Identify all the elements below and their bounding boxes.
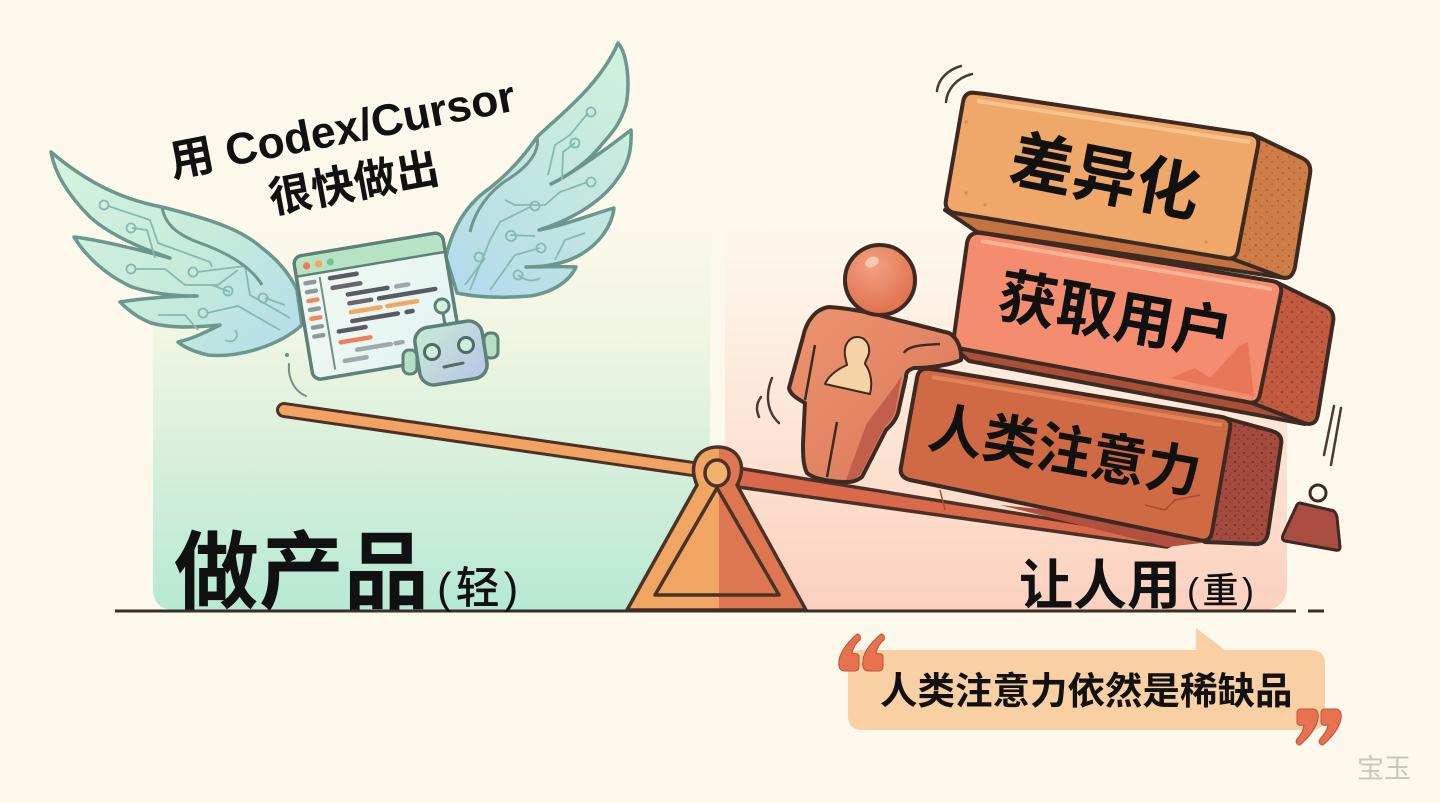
person head: [845, 245, 915, 315]
seesaw beam: heavy right arm: [738, 468, 1180, 547]
icon: left circuit wing: [51, 152, 302, 355]
brick label: 差异化: [1004, 123, 1206, 231]
heading main words: 做产品: [174, 526, 429, 621]
seesaw beam: light left arm: [284, 410, 700, 470]
brick label: 获取用户: [993, 263, 1237, 369]
brick surface marks: [940, 490, 1200, 510]
opening quote mark: [839, 634, 884, 671]
brick front face: [901, 369, 1230, 541]
person body: [789, 307, 961, 482]
brick surface marks: [964, 120, 1208, 244]
robot antenna: [435, 299, 449, 325]
icon: right circuit wing: [446, 43, 631, 297]
person badge: [825, 337, 871, 394]
brick label: 人类注意力: [924, 397, 1206, 505]
brick front face: [954, 233, 1281, 403]
seesaw fulcrum: [627, 447, 806, 610]
label line one: 用 Codex/Cursor: [165, 72, 519, 187]
fulcrum ring: [705, 460, 729, 486]
callout text: 人类注意力依然是稀缺品: [880, 670, 1292, 712]
brick bottom face: [945, 210, 1285, 278]
robot face: [424, 338, 474, 367]
icon: code window: [293, 232, 463, 380]
label: fast build with Codex/Cursor: [165, 72, 519, 223]
callout: attention is still scarce: [839, 628, 1341, 745]
brick side face: [1252, 282, 1333, 424]
motion lines around bricks and person: [757, 66, 1341, 465]
icon: robot: [403, 299, 498, 387]
closing quote mark: [1296, 709, 1341, 745]
icon: hanging weight: [1282, 485, 1340, 550]
brick: acquire users: [953, 233, 1333, 424]
person shading: [846, 375, 902, 480]
heading light note: (轻): [437, 564, 522, 613]
person arm fold and legs: [805, 344, 940, 477]
brick side face: [1205, 418, 1281, 544]
heading: get people to use (heavy): [1019, 556, 1257, 616]
heading heavy note: (重): [1187, 570, 1257, 611]
heading main words: 让人用: [1019, 556, 1181, 616]
robot ears: [403, 333, 498, 374]
motion lines under window: [286, 354, 306, 396]
label line two: 很快做出: [265, 145, 443, 223]
figure: person pushing bricks: [789, 245, 961, 482]
fulcrum inner triangle: [655, 488, 779, 595]
ground line: [115, 610, 1324, 612]
brick front face: [946, 93, 1258, 259]
robot head: [413, 319, 489, 387]
brick side face: [1230, 134, 1310, 278]
callout bubble: [848, 628, 1325, 730]
fulcrum outer triangle: [627, 447, 806, 610]
panel: green product side: [153, 220, 710, 610]
brick bottom face: [953, 347, 1305, 424]
watermark: 宝玉: [1357, 754, 1411, 784]
panel: pink user side: [725, 220, 1287, 610]
brick: differentiation: [945, 93, 1310, 278]
brick: human attention: [901, 369, 1281, 547]
heading: make product (light): [174, 526, 522, 621]
brick under shadow: [1000, 505, 1210, 547]
